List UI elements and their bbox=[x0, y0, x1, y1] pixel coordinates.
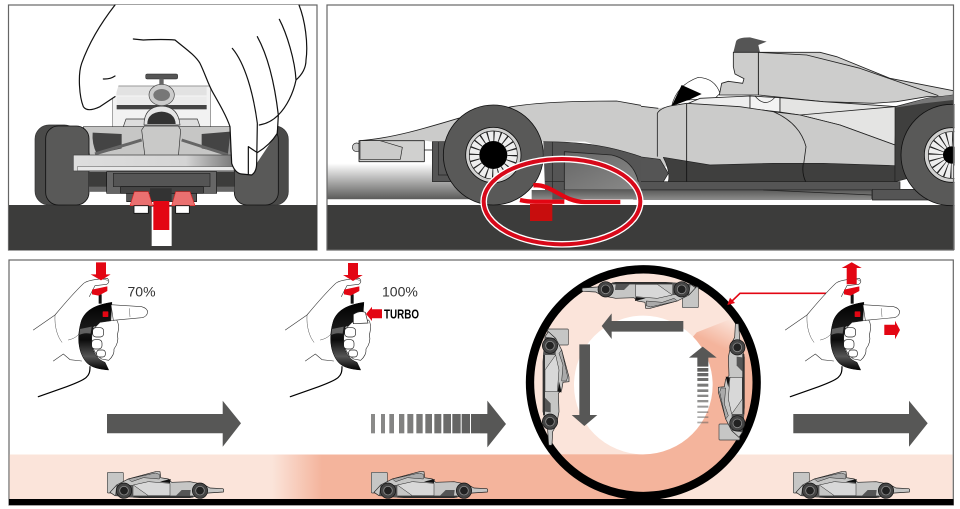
car on right wall bbox=[718, 324, 745, 440]
arrow: steady speed bbox=[107, 401, 241, 447]
hand: release bbox=[785, 278, 900, 397]
arrow: release right bbox=[884, 321, 900, 339]
arrow: left across top bbox=[602, 313, 683, 339]
arrow: press down bbox=[91, 262, 111, 280]
hand: 100% turbo bbox=[285, 278, 371, 397]
hand gripping car bbox=[79, 5, 307, 175]
small car 3 bbox=[793, 472, 910, 498]
track surface bbox=[9, 205, 317, 250]
car rear side view bbox=[633, 37, 960, 206]
car upside down bbox=[582, 282, 698, 308]
panel: front view of car on track bbox=[8, 5, 317, 250]
small car 2 bbox=[371, 472, 488, 498]
label: 70%: 70% bbox=[128, 284, 156, 300]
arrow: accelerating dashed bbox=[371, 401, 506, 447]
arrow: down bbox=[572, 344, 597, 426]
car front view bbox=[35, 74, 288, 246]
loop circle bbox=[526, 266, 761, 501]
hand: 70% throttle bbox=[33, 262, 148, 397]
arrow: dashed up bbox=[689, 347, 717, 423]
panel: controller sequence bbox=[9, 260, 954, 505]
red pointer head bbox=[727, 298, 735, 305]
track surface with shaded wall bbox=[327, 163, 957, 250]
highlight ellipse bbox=[484, 159, 640, 244]
arrow: release up bbox=[842, 262, 862, 284]
arrow: press turbo bbox=[366, 307, 382, 321]
arrow: press down 2 bbox=[343, 263, 363, 281]
panel: side view of car with guide bbox=[327, 5, 960, 250]
car on left wall bbox=[542, 329, 569, 445]
red pointer line to loop bbox=[730, 293, 826, 303]
arrow: steady speed 2 bbox=[793, 401, 928, 447]
label: 100%: 100% bbox=[382, 284, 418, 300]
panel border: side view bbox=[327, 5, 954, 250]
red guide blade bbox=[520, 185, 620, 221]
track speed band bbox=[9, 454, 954, 505]
small car 1 bbox=[107, 472, 224, 498]
turbo finger bbox=[353, 312, 368, 324]
car front side view bbox=[352, 101, 641, 244]
label: TURBO: TURBO bbox=[384, 307, 419, 321]
